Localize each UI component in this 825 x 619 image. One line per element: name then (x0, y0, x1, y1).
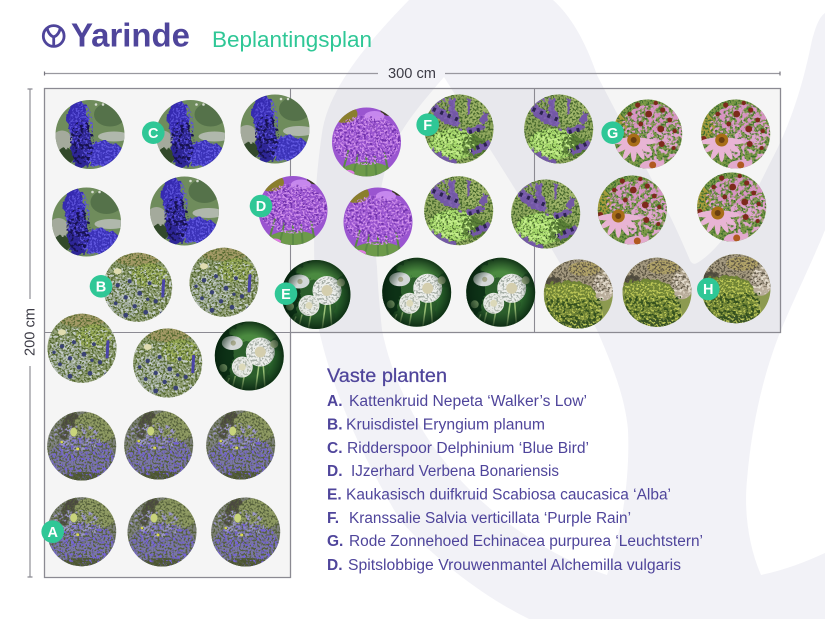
legend item F: F. (327, 510, 339, 527)
legend (327, 365, 703, 574)
plant E (465, 256, 537, 328)
bed dividers (44, 88, 534, 332)
plant F (523, 93, 595, 165)
legend item E: E. (327, 486, 342, 504)
plants group: plan (46, 93, 774, 572)
badge E (275, 282, 297, 305)
legend item D: IJzerhard Verbena Bonariensis (351, 463, 559, 480)
plant A (126, 496, 198, 572)
plant E (381, 256, 453, 328)
plant F (423, 93, 495, 165)
dimension: width 300 cm: 300 cm (388, 66, 436, 82)
plant B (188, 243, 260, 318)
plant C (146, 175, 224, 247)
plant G (611, 98, 686, 174)
legend item G: G. (327, 533, 343, 550)
heading: Beplantingsplan: Beplantingsplan (212, 27, 372, 52)
badge C: C (148, 126, 159, 142)
plant H (700, 253, 773, 331)
badge B: B (96, 279, 106, 295)
legend item A: A. (327, 393, 342, 410)
badge C (142, 121, 165, 144)
plant A (46, 410, 118, 486)
plant H (542, 258, 615, 336)
background logo watermark (314, 0, 825, 619)
dimension: width 300 cm (44, 66, 780, 82)
legend item D (Alchemilla): D. (327, 557, 342, 574)
panel: bed top row (44, 88, 780, 578)
badge H (697, 278, 720, 300)
plant A (123, 409, 195, 485)
logo wordmark: Yarinde (71, 16, 190, 54)
plant H (621, 256, 694, 334)
plant D (257, 174, 329, 252)
plant D (342, 185, 414, 264)
legend item E: Kaukasisch duifkruid Scabiosa caucasica ‘Alba’ (346, 486, 671, 504)
plant E (213, 320, 285, 392)
dimension: height 200 cm (22, 89, 38, 577)
plant C (237, 93, 315, 165)
plant B (132, 324, 204, 399)
plant A (210, 496, 282, 572)
legend item F: Kranssalie Salvia verticillata ‘Purple Rain’ (349, 510, 631, 527)
legend item B: Kruisdistel Eryngium planum (346, 416, 545, 434)
dimension: height 200 cm: 200 cm (22, 308, 38, 356)
badge F (416, 113, 439, 136)
badge D (250, 195, 272, 217)
badge F: F (423, 118, 432, 134)
legend item D: D. (327, 463, 342, 480)
legend heading: Vaste planten (327, 365, 447, 387)
plant C (52, 98, 130, 170)
badge G: G (607, 126, 618, 142)
logo (43, 16, 190, 54)
plant C (48, 186, 126, 258)
legend item A: Kattenkruid Nepeta ‘Walker’s Low’ (349, 393, 587, 410)
legend item C: Ridderspoor Delphinium ‘Blue Bird’ (347, 440, 589, 457)
badge A (41, 520, 64, 543)
badge G (601, 121, 624, 144)
plant E (280, 258, 352, 330)
plant G (695, 171, 770, 247)
legend item B: B. (327, 416, 342, 434)
plant D (330, 105, 402, 184)
plant F (510, 178, 582, 250)
legend item G: Rode Zonnehoed Echinacea purpurea ‘Leuchtstern’ (349, 533, 703, 550)
badge E: E (281, 287, 291, 303)
plant C (152, 98, 230, 170)
badge D: D (256, 199, 266, 215)
plant A (46, 496, 118, 572)
plant G (595, 174, 670, 250)
plant F (423, 175, 495, 247)
badge H: H (703, 282, 714, 298)
icon: Yarinde logo (43, 26, 64, 46)
legend item D (Alchemilla): Spitslobbige Vrouwenmantel Alchemilla vulgaris (348, 557, 681, 574)
badges (41, 113, 720, 543)
plant B (102, 248, 174, 323)
badge A: A (47, 525, 58, 541)
plant A (205, 409, 277, 485)
plant G (699, 98, 774, 174)
legend item C: C. (327, 440, 342, 457)
badge B (90, 275, 112, 298)
plant B (46, 309, 118, 384)
